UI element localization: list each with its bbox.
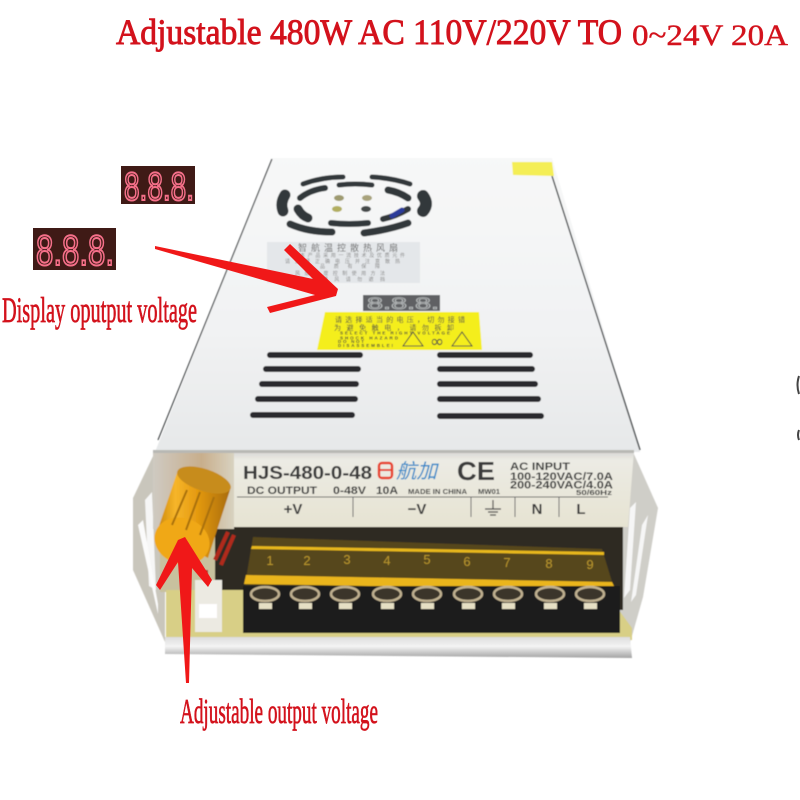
yellow warning label: 请选择适当的电压，切勿接错 (335, 315, 465, 324)
power supply unit (133, 158, 658, 658)
product spec sheet: 风扇温度控制使用方法 (295, 270, 385, 277)
DC output spec: 10A (376, 485, 398, 497)
edge artifact (798, 376, 799, 440)
yellow warning label: ∞ (430, 332, 444, 352)
title: 0~24V 20A (632, 19, 788, 52)
DC output spec (247, 485, 500, 497)
circuit board (166, 590, 632, 640)
product spec sheet: 本产品采用一流技术及优质元件 (300, 252, 405, 259)
DC output spec: MADE IN CHINA (408, 487, 468, 496)
gold cover (244, 537, 616, 590)
terminal screws (251, 587, 604, 601)
terminal numbers: 5 (423, 552, 431, 567)
terminal numbers: 3 (343, 552, 351, 567)
terminal clips (259, 603, 597, 609)
terminal labels: +V (284, 501, 302, 518)
wires (206, 532, 234, 600)
AC input spec: 200-240VAC/4.0A (510, 480, 613, 492)
terminal numbers: 9 (586, 557, 594, 572)
brand logo: 航加 (396, 460, 439, 483)
right side bracket (618, 452, 658, 643)
case interior (160, 525, 623, 610)
AC input spec: 50/60Hz (576, 490, 613, 497)
DC output spec: 0-48V (333, 485, 367, 497)
caption: display output voltage: Display oputput voltage (2, 290, 197, 330)
block body (243, 586, 620, 633)
terminal labels: N (532, 501, 542, 518)
terminal numbers: 7 (503, 555, 511, 570)
DC output spec: DC OUTPUT (247, 485, 317, 497)
ventilation slots left (253, 355, 360, 415)
terminal numbers: 6 (463, 554, 471, 569)
bottom rail (165, 637, 632, 658)
terminal numbers: 8 (545, 556, 553, 571)
product spec sheet: 智航温控散热风扇 (298, 242, 398, 253)
product spec sheet: 请选择正确电压并注意散热 (285, 258, 400, 265)
AC input spec: 100-120VAC/7.0A (510, 471, 613, 483)
terminal block (243, 537, 620, 633)
yellow warning label: DO NOT (338, 339, 364, 344)
brand logo (379, 460, 439, 483)
small display sample top: 8.8.8. (124, 165, 194, 209)
built-in voltage display (363, 294, 440, 313)
left side bracket (133, 452, 165, 642)
golden adjustment knob (148, 461, 234, 572)
yellow corner sticker (512, 162, 554, 176)
terminal numbers: 4 (383, 553, 391, 568)
ventilation slots right (440, 355, 541, 416)
model name: HJS-480-0-48 (243, 463, 372, 483)
arrow to knob (156, 537, 212, 683)
yellow warning label: DISASSEMBLE! (338, 343, 394, 348)
product spec sheet: 散热通风请勿遮挡 (300, 276, 385, 283)
white connector (195, 580, 222, 632)
yellow warning label: 为避免触电，请勿拆卸 (334, 323, 454, 332)
terminal numbers: 1 (266, 553, 274, 568)
terminal labels: L (576, 501, 586, 518)
title: Adjustable 480W AC 110V/220V TO (116, 12, 622, 52)
DC output spec: MW01 (478, 489, 500, 496)
AC input spec: AC INPUT (510, 461, 570, 473)
terminal numbers: 2 (303, 553, 311, 568)
terminal labels: −V (408, 501, 426, 518)
terminal numbers (266, 552, 594, 572)
small display sample lower: 8.8.8. (36, 227, 114, 275)
CE mark: CE (457, 456, 495, 486)
product spec sheet: 品质有保障 (320, 263, 380, 270)
product spec sheet (267, 242, 420, 283)
front label panel (153, 450, 634, 529)
fan grille (282, 177, 426, 233)
yellow warning label (317, 312, 482, 352)
top face of the metal case (155, 158, 640, 452)
AC input spec (510, 461, 613, 497)
terminal labels (237, 497, 608, 518)
small display sample top (121, 165, 195, 209)
arrow to display (155, 244, 338, 313)
yellow warning label: SELECT THE RIGHT VOLTAGE (340, 330, 450, 336)
yellow warning label: SHOCK HAZARD (340, 336, 399, 340)
fan screws (332, 195, 372, 212)
caption: adjustable output voltage: Adjustable output voltage (180, 692, 378, 731)
built-in voltage display: 8.8.8. (367, 294, 439, 313)
